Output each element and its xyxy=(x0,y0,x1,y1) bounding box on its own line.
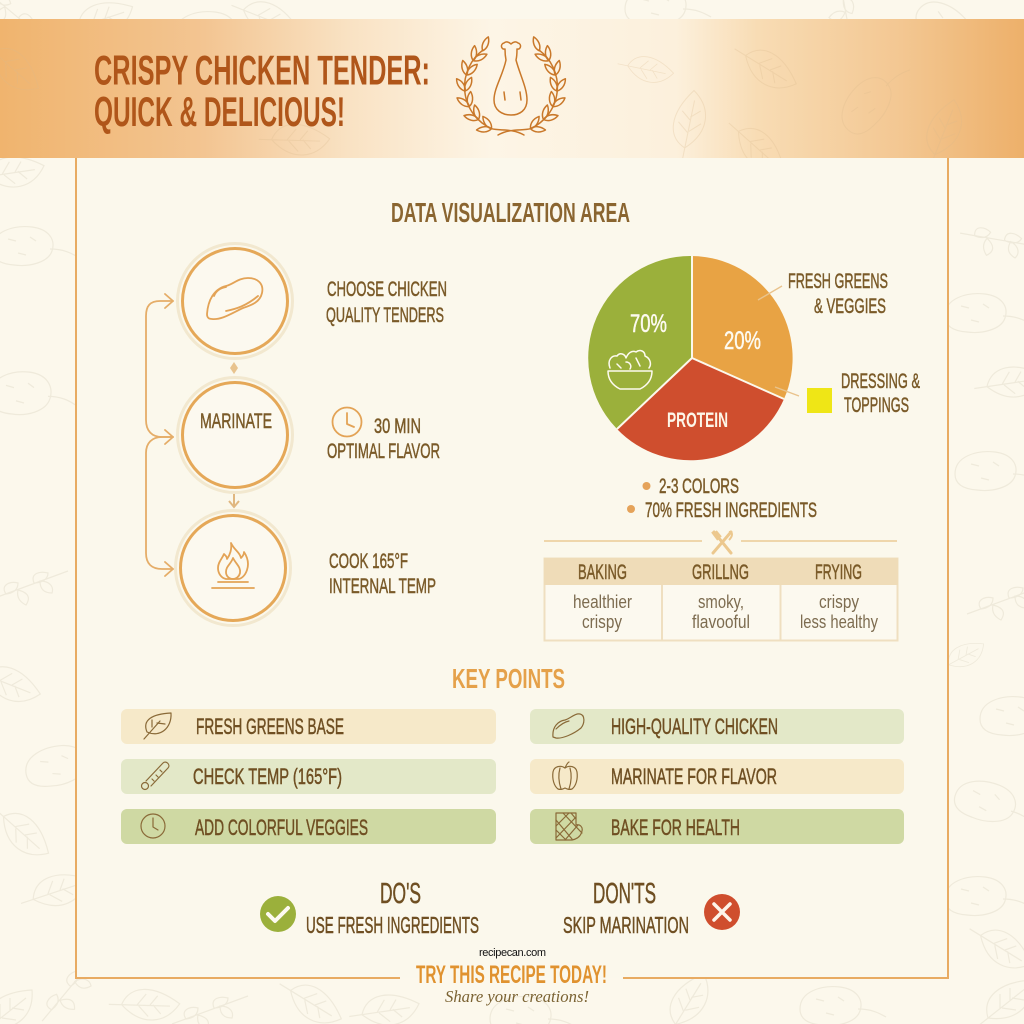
icon: drumstick wreath xyxy=(454,36,568,135)
source credit: recipecan.com xyxy=(479,947,546,959)
step labels: CHOOSE CHICKEN xyxy=(327,278,447,301)
connector arrow down xyxy=(229,494,239,507)
pie labels xyxy=(788,270,920,417)
table: cooking methods xyxy=(544,558,898,641)
don'ts xyxy=(563,878,740,938)
key point: add colorful veggies xyxy=(121,809,496,844)
icon: cross xyxy=(704,894,740,930)
table: cooking methods: FRYING xyxy=(815,561,862,584)
call to action xyxy=(416,961,607,1006)
title xyxy=(94,46,430,135)
key point: check temp xyxy=(121,759,496,794)
step labels: COOK 165°F xyxy=(329,550,408,573)
key point: fresh greens base: FRESH GREENS BASE xyxy=(196,714,344,739)
step labels: QUALITY TENDERS xyxy=(326,304,444,327)
icon: salad bowl xyxy=(608,351,652,389)
key point: add colorful veggies: ADD COLORFUL VEGGIES xyxy=(195,815,368,840)
table: cooking methods: crispy xyxy=(582,612,622,632)
pie chart: 20% xyxy=(724,327,761,355)
key point: marinate for flavor: MARINATE FOR FLAVOR xyxy=(611,764,777,789)
step labels: OPTIMAL FLAVOR xyxy=(327,440,440,463)
header band xyxy=(0,19,1024,176)
pie labels: FRESH GREENS xyxy=(788,270,888,293)
key point: marinate for flavor xyxy=(530,759,904,794)
pie notes xyxy=(627,475,817,522)
do's: DO'S xyxy=(380,878,421,910)
table: cooking methods: healthier xyxy=(573,592,632,612)
call to action: TRY THIS RECIPE TODAY! xyxy=(416,961,607,989)
step 2: marinate xyxy=(178,378,292,492)
divider with utensils icon xyxy=(544,531,897,553)
table: cooking methods: GRILLNG xyxy=(692,561,749,584)
heading: key points: KEY POINTS xyxy=(452,663,565,694)
pie labels: & VEGGIES xyxy=(814,295,886,318)
don'ts: DON'TS xyxy=(593,878,656,910)
pie leader lines xyxy=(758,286,799,396)
connector diamond xyxy=(230,362,238,374)
step 3: cook xyxy=(176,510,290,626)
table: cooking methods: crispy xyxy=(819,592,859,612)
do's xyxy=(260,878,479,938)
key point: bake for health: BAKE FOR HEALTH xyxy=(611,815,740,840)
step labels: INTERNAL TEMP xyxy=(329,575,436,598)
legend swatch: dressing xyxy=(807,388,832,413)
pie labels: DRESSING & xyxy=(841,370,920,393)
step labels: 30 MIN xyxy=(374,415,421,438)
key point: check temp: CHECK TEMP (165°F) xyxy=(193,764,342,789)
step 1: choose chicken xyxy=(178,244,292,358)
do's: USE FRESH INGREDIENTS xyxy=(306,912,479,938)
icon: flame xyxy=(212,543,254,588)
pie notes: 70% FRESH INGREDIENTS xyxy=(645,499,817,522)
icon: clock xyxy=(332,408,362,436)
table: cooking methods: less healthy xyxy=(800,612,878,632)
step 2: marinate: MARINATE xyxy=(200,410,272,433)
title: CRISPY CHICKEN TENDER: xyxy=(94,46,430,94)
step labels xyxy=(326,278,447,598)
don'ts: SKIP MARINATION xyxy=(563,912,689,938)
flow arrows xyxy=(146,294,173,576)
key point: fresh greens base xyxy=(121,709,496,744)
call to action: Share your creations! xyxy=(445,987,589,1006)
table: cooking methods: flavooful xyxy=(692,612,750,632)
pie notes: 2-3 COLORS xyxy=(659,475,739,498)
key point: bake for health xyxy=(530,809,904,844)
icon: chicken breast xyxy=(207,278,262,319)
pie chart: 70% xyxy=(630,310,667,338)
title: QUICK & DELICIOUS! xyxy=(94,88,345,135)
pie chart: PROTEIN xyxy=(667,409,728,432)
pie chart xyxy=(588,256,793,460)
heading: data visualization area: DATA VISUALIZATION AREA xyxy=(391,197,630,228)
icon: check xyxy=(260,896,296,932)
key point: high-quality chicken: HIGH-QUALITY CHICKEN xyxy=(611,714,778,739)
pie labels: TOPPINGS xyxy=(844,394,909,417)
panel: main content frame xyxy=(76,158,948,978)
key point: high-quality chicken xyxy=(530,709,904,744)
table: cooking methods: BAKING xyxy=(578,561,627,584)
table: cooking methods: smoky, xyxy=(698,592,744,612)
